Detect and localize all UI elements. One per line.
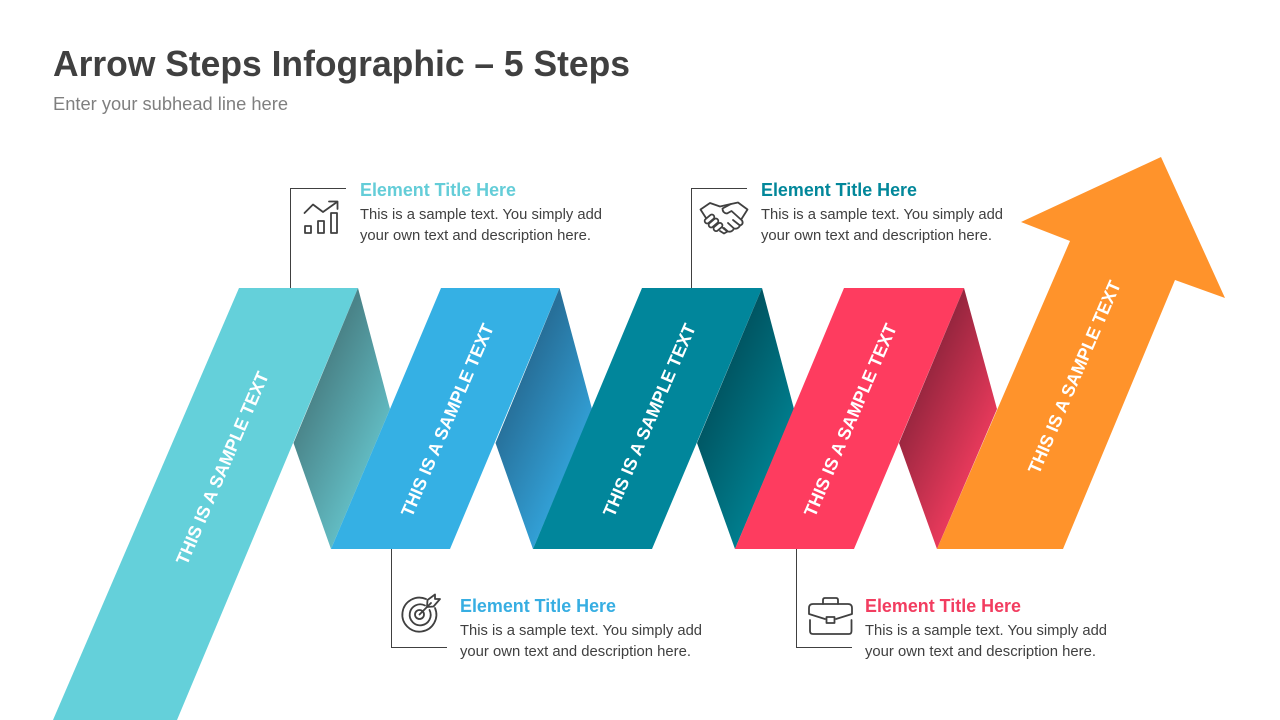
callout text: your own text and description here. bbox=[360, 228, 591, 244]
icon: target with dart bbox=[402, 594, 440, 632]
fold 2 bbox=[496, 288, 592, 549]
callout title: Element Title Here bbox=[460, 596, 616, 616]
step 3 band bbox=[533, 288, 762, 549]
fold 1 bbox=[294, 288, 390, 549]
step 5 arrow bbox=[937, 157, 1225, 549]
callout text bbox=[460, 623, 702, 660]
fold 3 bbox=[697, 288, 794, 549]
step 4 label: THIS IS A SAMPLE TEXT bbox=[800, 321, 901, 520]
callout text: This is a sample text. You simply add bbox=[761, 207, 1003, 223]
step 2 label: THIS IS A SAMPLE TEXT bbox=[397, 321, 498, 520]
step 1 band bbox=[53, 288, 358, 720]
callout text: your own text and description here. bbox=[865, 644, 1096, 660]
callout: bottom left bbox=[392, 549, 702, 660]
callout: top left bbox=[290, 180, 602, 288]
icon: handshake bbox=[700, 202, 748, 234]
step 1 label: THIS IS A SAMPLE TEXT bbox=[172, 369, 273, 568]
callout: bottom right bbox=[796, 549, 1107, 660]
callout text bbox=[360, 207, 602, 244]
callout text: your own text and description here. bbox=[460, 644, 691, 660]
step 4 band bbox=[735, 288, 964, 549]
callout text: This is a sample text. You simply add bbox=[460, 623, 702, 639]
icon: growth chart bbox=[304, 202, 338, 233]
fold 4 bbox=[899, 288, 997, 549]
subhead: Enter your subhead line here bbox=[53, 94, 288, 114]
step 5 label: THIS IS A SAMPLE TEXT bbox=[1024, 278, 1125, 477]
callout text bbox=[865, 623, 1107, 660]
zigzag arrow diagram bbox=[53, 157, 1225, 720]
icon: briefcase bbox=[809, 598, 852, 634]
step 2 band bbox=[331, 288, 560, 549]
callout title: Element Title Here bbox=[761, 180, 917, 200]
callout text: This is a sample text. You simply add bbox=[865, 623, 1107, 639]
callout title: Element Title Here bbox=[865, 596, 1021, 616]
callout text bbox=[761, 207, 1003, 244]
callout text: your own text and description here. bbox=[761, 228, 992, 244]
callout text: This is a sample text. You simply add bbox=[360, 207, 602, 223]
callout: top right bbox=[692, 180, 1003, 288]
step 3 label: THIS IS A SAMPLE TEXT bbox=[599, 321, 700, 520]
title: Arrow Steps Infographic – 5 Steps bbox=[53, 43, 630, 84]
callout title: Element Title Here bbox=[360, 180, 516, 200]
